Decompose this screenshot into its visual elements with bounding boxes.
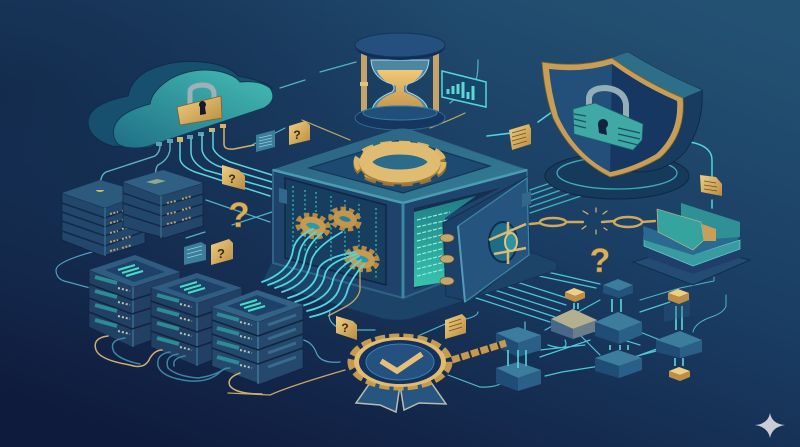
check mark [381,354,422,371]
gear three [345,245,379,273]
cloud back layer [88,61,272,148]
right chain [602,217,655,227]
cloud front layer [114,70,273,148]
gear two [329,207,361,231]
ribbons [356,378,446,412]
chain from badge to cubes [452,343,506,360]
document tag on shield line [700,175,722,196]
network cube bundle lines [525,300,670,376]
open interior with teal data [414,188,500,289]
question tag and document near badge [336,314,466,340]
question tag near servers: ? [217,246,225,261]
certification badge [351,337,449,412]
gold small cube [565,288,585,309]
bottom server stack C [212,290,303,384]
cyan data cable bundle into gears [262,229,364,317]
sparkle watermark [755,413,785,438]
cube centre [595,312,642,344]
left screen with data columns [285,178,386,285]
cube [496,350,541,391]
small document and question icons, upper left [184,121,310,265]
document tag [445,314,466,339]
light gold cube [551,309,597,339]
top plate [355,34,445,60]
cube lower centre [595,345,642,378]
gold cube bottom right [669,358,690,381]
teal cube top [603,279,633,312]
large question mark right: ? [590,242,610,280]
cube right [656,298,702,358]
question tag lower [222,165,245,190]
cube [496,327,541,357]
stacked folder tray [633,203,750,285]
hourglass [355,33,445,130]
gear one [296,212,330,240]
gold cube top right [668,289,689,304]
shield with lock on platform [542,52,702,199]
break sparks [582,208,607,234]
document icon lower [184,242,206,265]
question tag lower: ? [228,172,236,186]
teal padlock [573,88,643,150]
central vault [273,129,531,302]
vault door [443,177,530,302]
cloud connector ports [156,124,226,146]
shield inner [549,64,677,172]
left chain [530,218,583,226]
right face [403,170,527,298]
question tag: ? [293,128,301,142]
document icon [256,130,275,152]
padlock on cloud [177,85,222,125]
door wheel [489,222,526,264]
top face [273,129,527,203]
glass and sand [371,60,429,112]
door hinges [440,234,454,285]
gold cable from gear [328,270,360,316]
left face [273,170,403,298]
vault base plate [262,250,557,320]
question tag near servers [211,239,233,265]
document tag above vault [509,124,531,150]
shield gold rim [542,58,683,177]
server patch cables [95,336,262,394]
bottom server stack A [89,255,180,347]
bottom server stack B [151,273,242,366]
cloud with padlock [88,61,273,148]
shield back [612,52,702,174]
bottom plate [355,106,445,130]
hourglass pillars [361,52,367,114]
left-side small gears [296,207,379,273]
question tag [289,121,310,145]
gold gear on vault top [358,145,442,182]
broken chain [530,208,655,234]
cables from cloud to vault and servers [100,128,272,196]
large question mark: ? [228,196,250,235]
vault side clips [279,188,531,207]
top-left server stack, five units [62,180,145,256]
second top-left server stack, four units [123,170,203,238]
data wiring: network of thin connector lines [56,60,726,395]
question tag: ? [341,321,349,335]
chart panel beside hourglass [442,71,486,107]
blockchain cubes [496,279,702,391]
platform [545,153,689,199]
